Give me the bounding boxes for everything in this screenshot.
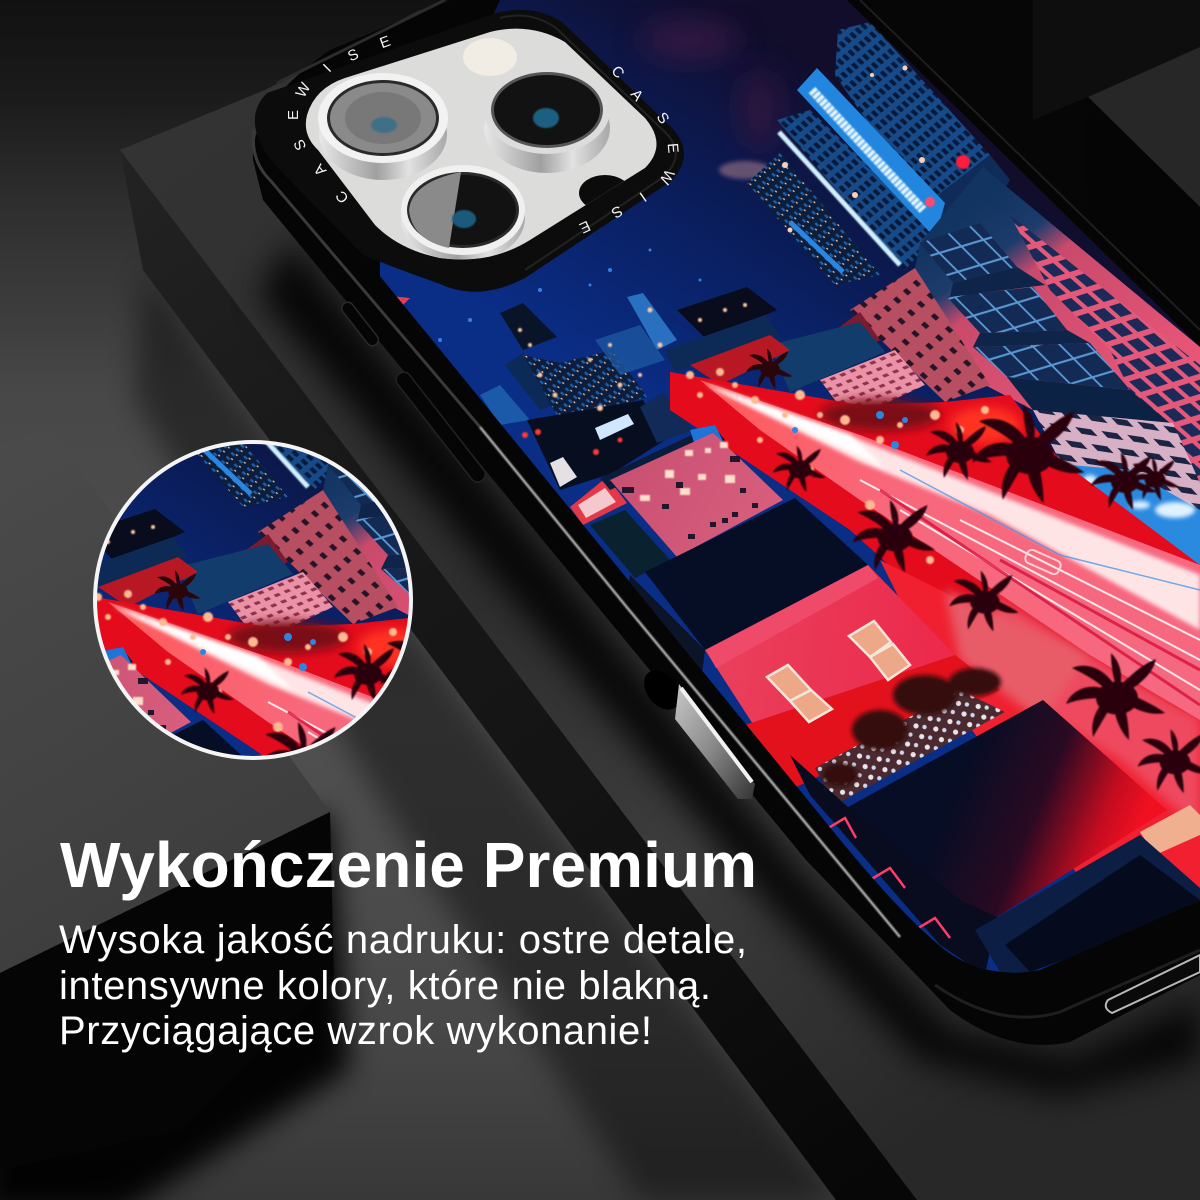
- camera island: [255, 10, 684, 292]
- side button: small: [339, 300, 381, 348]
- lower pale facade: [1033, 410, 1200, 510]
- CASEWISE ring lettering: E: [378, 33, 393, 52]
- CASEWISE ring lettering: W: [655, 166, 677, 188]
- tower front slab: [797, 68, 945, 238]
- car: [1024, 548, 1062, 576]
- CASEWISE ring lettering: E: [577, 217, 593, 236]
- high-rise window block 1: [920, 223, 1017, 283]
- tree with white reflections: [815, 690, 1005, 805]
- screen artwork: [352, 0, 1200, 975]
- body text: Przyciągające wzrok wykonanie!: [59, 1009, 652, 1053]
- CASEWISE ring lettering: E: [664, 142, 681, 154]
- body text: Wysoka jakość nadruku: ostre detale,: [59, 918, 747, 962]
- CASEWISE ring lettering: C: [332, 187, 352, 206]
- phone case body: [253, 0, 1200, 1045]
- mid red-brick block: [850, 268, 990, 402]
- pink triangles at the edge: [352, 240, 372, 258]
- high-rise wall: [915, 167, 1200, 520]
- tower rear: [835, 22, 990, 205]
- dark roof 2: [848, 700, 1167, 917]
- dark roof 3: [975, 835, 1200, 972]
- high-rise window block 3: [973, 343, 1130, 390]
- high-rise right windows: [1010, 215, 1200, 480]
- main block side face: [120, 150, 917, 1200]
- camera control button: [637, 663, 755, 799]
- CASEWISE ring lettering: E: [285, 110, 302, 120]
- front block shadow: [0, 812, 350, 1200]
- pink window block: [600, 425, 725, 490]
- lens top right: [484, 66, 610, 173]
- detail magnifier circle: [0, 222, 618, 1197]
- CASEWISE ring lettering: A: [627, 86, 646, 105]
- island outer ring: [255, 10, 684, 292]
- charging port: [1106, 955, 1200, 1013]
- CASEWISE ring lettering: W: [293, 79, 315, 101]
- phone shadow: [259, 240, 1200, 1095]
- red street band: [670, 372, 1200, 920]
- left neon signs: [550, 457, 577, 487]
- body text: intensywne kolory, które nie blakną.: [59, 964, 711, 1008]
- CASEWISE ring lettering: S: [291, 137, 310, 153]
- body text: [59, 918, 747, 1053]
- lit windows: [767, 621, 910, 722]
- silver camera plate: [306, 29, 656, 260]
- side shadow on floor: [135, 270, 836, 1200]
- block top right: [1088, 47, 1200, 207]
- CASEWISE ring lettering: S: [345, 46, 361, 65]
- CASEWISE ring lettering: I: [636, 188, 649, 205]
- CASEWISE ring lettering: S: [653, 109, 672, 127]
- tower middle slab: [777, 110, 938, 270]
- front block face: [0, 812, 334, 1170]
- night sky: [380, 0, 1200, 975]
- high-rise window block 2: [947, 287, 1067, 333]
- low pale block: [820, 350, 925, 420]
- distant skyline: [500, 303, 557, 350]
- tower left lit: [747, 153, 880, 285]
- microphone hole: [579, 175, 624, 205]
- CASEWISE ring lettering: A: [311, 160, 330, 179]
- street lights: [686, 368, 989, 564]
- red building: [705, 565, 955, 735]
- CASEWISE ring lettering: S: [608, 202, 625, 221]
- lens top left: [318, 73, 448, 180]
- title: Wykończenie Premium: [60, 829, 757, 901]
- CASEWISE ring lettering: I: [320, 61, 335, 76]
- front block top: [0, 428, 330, 973]
- lens bottom: [401, 165, 525, 262]
- side button: volume: [393, 369, 488, 485]
- CASEWISE ring lettering: [285, 33, 681, 236]
- road with light trails: [700, 380, 1200, 720]
- flash: [463, 38, 517, 76]
- CASEWISE ring lettering: C: [608, 63, 628, 82]
- facade left: [790, 755, 997, 975]
- dark roof 1: [629, 575, 705, 671]
- palms: [773, 404, 1200, 793]
